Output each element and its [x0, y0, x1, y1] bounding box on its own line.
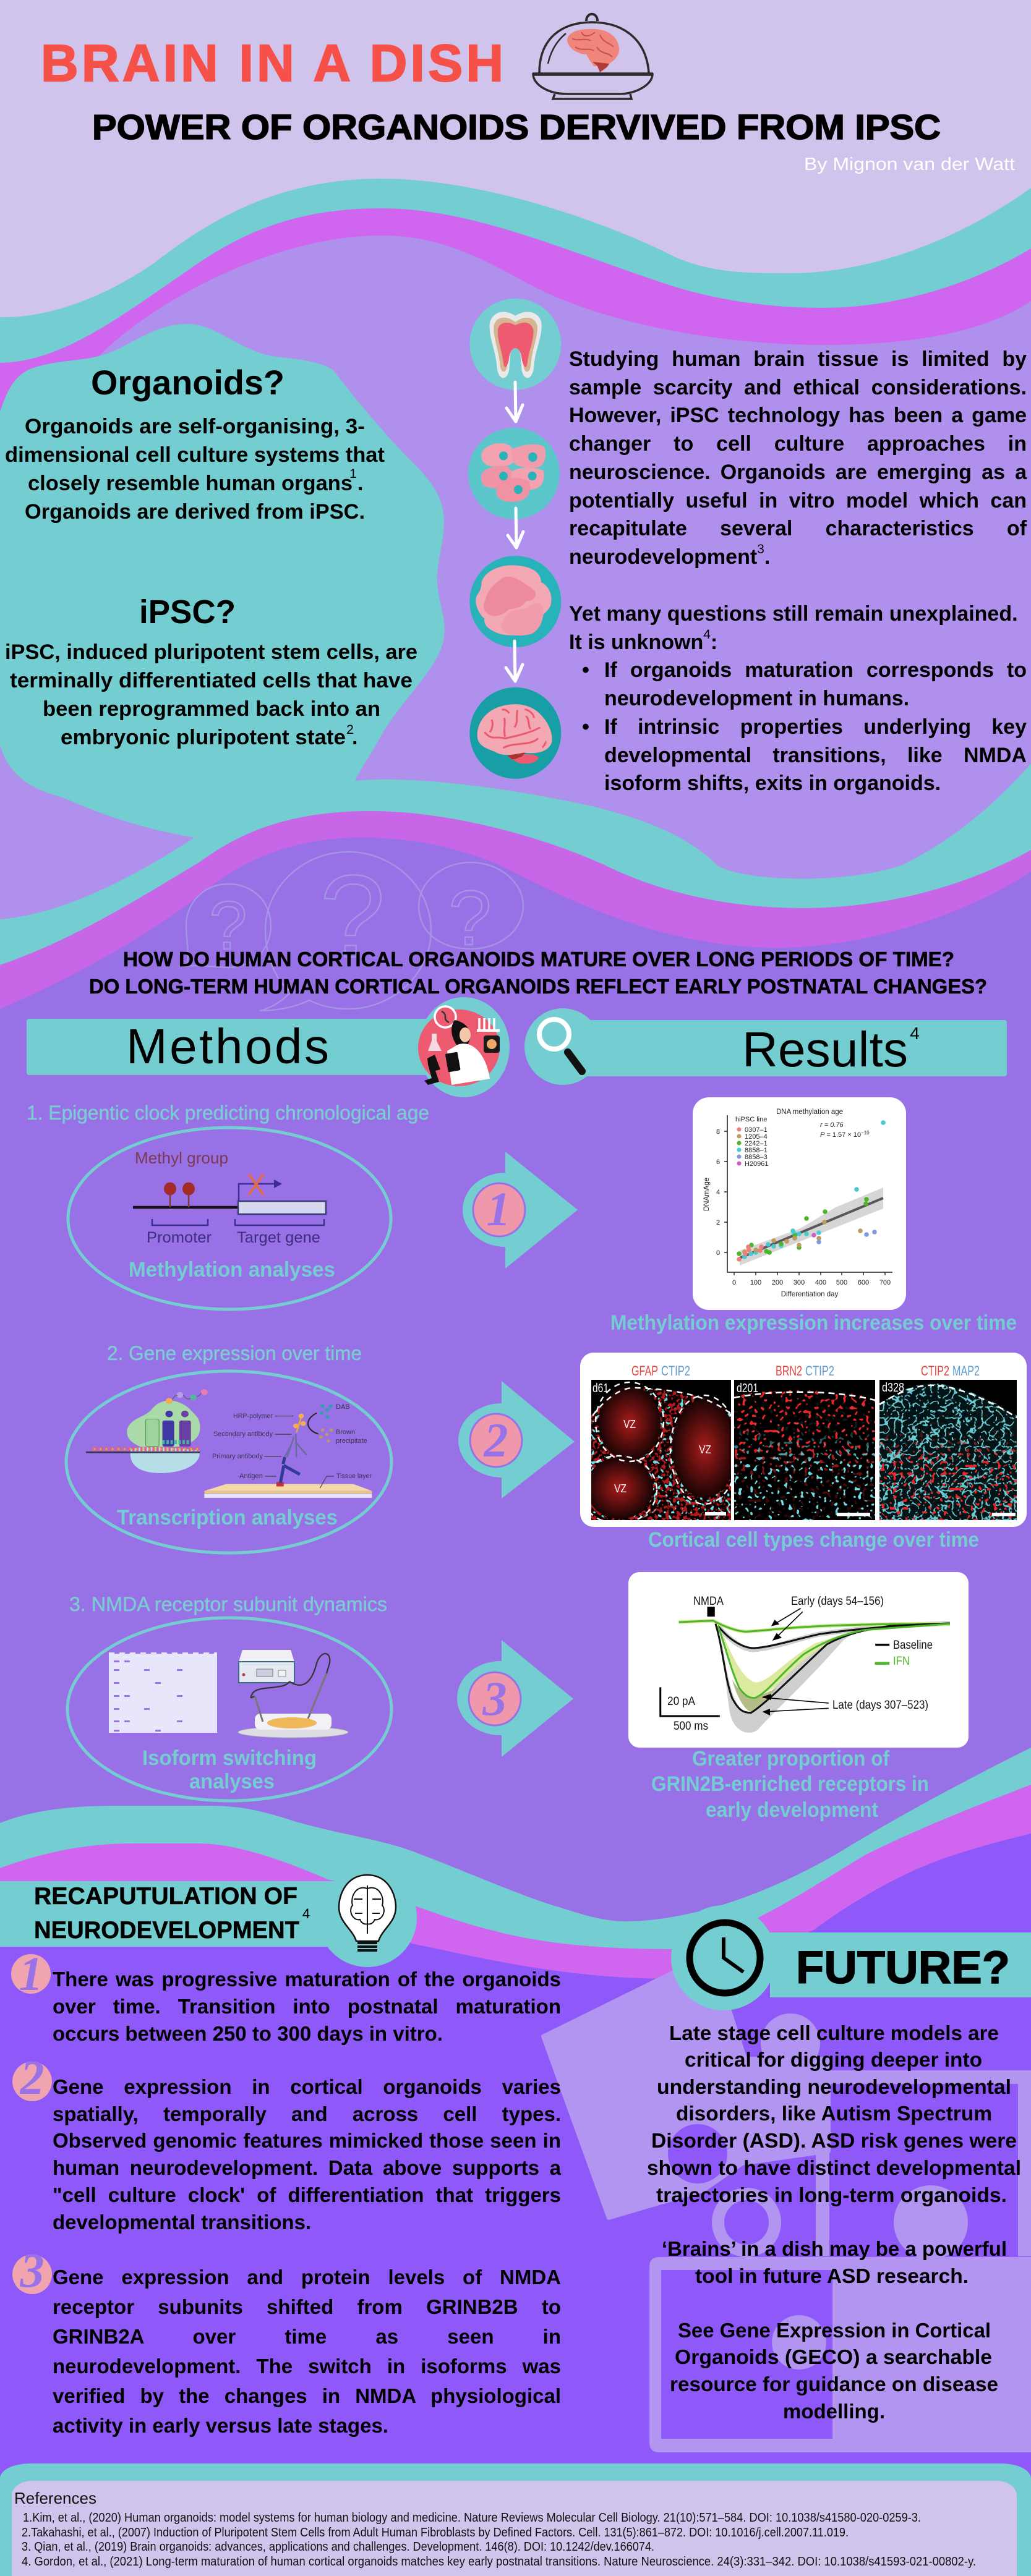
chart: cortical cell type images: BRN2 [776, 1363, 802, 1379]
text: why iPSC organoids matter: Studying human brain tissue is limited by [569, 347, 1027, 371]
icon: number 1 badge [11, 1947, 51, 2000]
arrow: step 3 [457, 1640, 573, 1757]
panel: results banner: Results [742, 1022, 908, 1077]
chart: cortical cell type images: MAP2 [952, 1363, 980, 1379]
panel: methylation method [68, 1128, 391, 1309]
text: iPSC definition: been reprogrammed back into an [43, 697, 380, 721]
text: future paragraphs [647, 2021, 1021, 2423]
text: why iPSC organoids matter: recapitulate several characteristics of [569, 517, 1027, 540]
panel: isoform switching method: Isoform switching [142, 1746, 317, 1770]
text: why iPSC organoids matter: neuroscience. Organoids are emerging as a [569, 461, 1027, 484]
text: organoids definition: closely resemble human organs [28, 472, 353, 495]
panel: transcription method: DAB [336, 1403, 350, 1411]
chart: DNA methylation age scatter: 400 [815, 1279, 826, 1286]
panel: references: 4. Gordon, et al., (2021) Long-term maturation of human cortical organoids matches key early postnatal transitions. Nature Neuroscience. 24(3):331–342. DOI: 10.1038/s41593-021-00802-y. [22, 2555, 976, 2569]
text: future paragraphs: critical for digging deeper into [685, 2048, 982, 2071]
panel: methods banner: Methods [126, 1019, 329, 1074]
text: future paragraphs: trajectories in long-term organoids. [656, 2183, 1007, 2206]
panel: transcription method: Brown [336, 1429, 355, 1436]
icon: light bulb brain [339, 1875, 396, 1950]
text: open questions list: Yet many questions still remain unexplained. [569, 602, 1018, 626]
image: d61 panel: VZ [623, 1418, 636, 1430]
panel: definitions blob [0, 324, 445, 838]
text: open questions list [569, 602, 1027, 795]
panel: results banner [524, 1008, 1007, 1085]
panel: references: 3. Qian, et al., (2019) Brain organoids: advances, applications and challenges. Development. 146(8). DOI: 10.1242/dev.166074. [22, 2540, 654, 2554]
text: why iPSC organoids matter [569, 347, 1027, 569]
chart: DNA methylation age scatter: 2 [716, 1219, 720, 1226]
chart: DNA methylation age scatter: DNA methylation age [776, 1108, 843, 1116]
text: organoids definition: Organoids are derived from iPSC. [25, 500, 365, 524]
chart: DNA methylation age scatter: 200 [772, 1279, 783, 1286]
heading: Organoids: Organoids? [91, 363, 284, 402]
text: open questions list: • [582, 715, 589, 739]
panel: references: 1.Kim, et al., (2020) Human organoids: model systems for human biology and medicine. Nature Reviews Molecular Cell Biology. 21(10):571–584. DOI: 10.1038/s41580-020-0259-3. [23, 2511, 921, 2525]
chart: cortical cell type images: GFAP [631, 1363, 658, 1379]
text: finding 2: developmental transitions. [53, 2211, 311, 2234]
image: d201 panel [734, 1380, 875, 1520]
chart: DNA methylation age scatter: 1205–4 [745, 1133, 768, 1141]
icon: speech bubbles with question marks: ? [209, 888, 247, 964]
text: open questions list: • [582, 658, 589, 682]
text: iPSC definition [5, 640, 417, 749]
icon: clock [690, 1923, 760, 1993]
chart: DNA methylation age scatter: r = 0.76 [820, 1121, 844, 1129]
icon: brain under a glass cloche [533, 14, 653, 99]
chart: DNA methylation age scatter [693, 1097, 906, 1310]
icon: stem cells [468, 428, 560, 519]
icon: gel [109, 1654, 217, 1733]
text: organoids definition: 1 [349, 467, 357, 481]
chart: DNA methylation age scatter: −10 [861, 1130, 870, 1136]
panel: future banner [671, 1905, 1031, 2010]
panel: references [0, 2463, 1031, 2576]
text: future paragraphs: understanding neurodevelopmental [657, 2075, 1011, 2098]
chart: DNA methylation age scatter: 0 [732, 1279, 736, 1286]
icon: number 2 badge [12, 2051, 52, 2104]
chart: NMDA current traces: 20 pA [667, 1695, 695, 1708]
arrow: tooth to cells [507, 382, 523, 422]
text: organoids definition: dimensional cell culture systems that [5, 443, 385, 467]
panel: transcription method: Primary antibody [212, 1453, 263, 1460]
arrow: step 3: 3 [482, 1672, 507, 1725]
text: why iPSC organoids matter: However, iPSC technology has been a game [569, 404, 1027, 427]
chart: DNA methylation age scatter: P = 1.57 × 10 [820, 1131, 861, 1139]
heading: research questions: HOW DO HUMAN CORTICAL ORGANOIDS MATURE OVER LONG PERIODS OF TIME? [123, 948, 954, 971]
text: finding 3: GRINB2A over time as seen in [53, 2325, 561, 2348]
panel: references: 2.Takahashi, et al., (2007) Induction of Pluripotent Stem Cells from Adult Human Fibroblasts by Defined Factors. Cell. 131(5):861–872. DOI: 10.1016/j.cell.2007.11.019. [22, 2526, 849, 2540]
caption: result 2: Cortical cell types change over time [648, 1528, 979, 1552]
caption: result 3: Greater proportion of [692, 1747, 890, 1770]
icon: speech bubbles with question marks: ? [320, 851, 385, 982]
heading: step 1: 1. Epigentic clock predicting chronological age [27, 1102, 429, 1124]
text: future paragraphs: resource for guidance on disease [670, 2373, 998, 2395]
text: finding 2: human neurodevelopment. Data above supports a [53, 2156, 561, 2179]
arrow: step 1 [463, 1152, 578, 1269]
chart: DNA methylation age scatter: 2242–1 [745, 1140, 768, 1147]
chart: cortical cell type images [580, 1353, 1027, 1527]
chart: NMDA current traces: Late (days 307–523) [832, 1699, 928, 1712]
text: finding 1: There was progressive maturation of the organoids [53, 1968, 561, 1991]
icon: tooth [469, 299, 561, 390]
icon: speech bubbles with question marks: ? [448, 875, 492, 961]
image: d61 panel: d61 [593, 1382, 609, 1395]
arrow: cells to organoid [508, 508, 523, 548]
chart: NMDA current traces: IFN [893, 1655, 910, 1668]
text: iPSC definition: 2 [346, 723, 354, 737]
chart: DNA methylation age scatter: hiPSC line [735, 1116, 767, 1123]
text: organoids definition: . [357, 472, 363, 495]
chart: DNA methylation age scatter: 100 [750, 1279, 761, 1286]
text: finding 3 [53, 2266, 561, 2437]
text: finding 3: verified by the changes in NMDA physiological [53, 2384, 561, 2407]
text: future paragraphs: tool in future ASD research. [695, 2264, 969, 2287]
text: finding 2: spatially, temporally and across cell types. [53, 2102, 561, 2125]
chart: DNA methylation age scatter: Differentiation day [781, 1291, 838, 1298]
arrow: organoid to brain [506, 641, 523, 681]
icon: number 3 badge: 3 [20, 2243, 45, 2297]
icon: organoid [469, 556, 561, 647]
chart: NMDA current traces: 500 ms [674, 1720, 708, 1733]
chart: DNA methylation age scatter: 600 [858, 1279, 869, 1286]
panel: recapitulation banner: 4 [302, 1906, 310, 1921]
text: iPSC definition: terminally differentiated cells that have [10, 669, 413, 692]
text: why iPSC organoids matter: potentially useful in vitro model which can [569, 489, 1027, 512]
arrow: step 2 [458, 1381, 575, 1498]
panel: transcription method: precipitate [336, 1437, 367, 1445]
panel: recapitulation banner [0, 1868, 417, 1967]
icon: electrophoresis device [238, 1650, 348, 1738]
text: finding 1 [53, 1968, 561, 2045]
panel: methylation method: Methylation analyses [129, 1258, 335, 1282]
panel: references: References [14, 2489, 96, 2507]
text: future paragraphs: disorders, like Autism Spectrum [676, 2102, 992, 2125]
text: future paragraphs: See Gene Expression in Cortical [678, 2319, 991, 2342]
panel: recapitulation banner: RECAPUTULATION OF [34, 1883, 297, 1910]
icon: magnifying glass [539, 1019, 582, 1071]
text: finding 1: over time. Transition into postnatal maturation [53, 1995, 561, 2018]
chart: NMDA current traces [628, 1572, 969, 1748]
panel: methylation method: Methyl group [135, 1149, 228, 1167]
text: open questions list: If organoids maturation corresponds to [604, 658, 1027, 682]
icon: speech bubbles with question marks [186, 851, 523, 1011]
panel: transcription method: Tissue layer [336, 1473, 372, 1480]
caption: result 3 [651, 1747, 929, 1822]
text: open questions list: neurodevelopment in humans. [604, 687, 909, 710]
chart: DNA methylation age scatter: 0 [716, 1249, 720, 1257]
text: iPSC definition: iPSC, induced pluripotent stem cells, are [5, 640, 417, 664]
icon: number 2 badge: 2 [20, 2051, 45, 2104]
text: organoids definition [5, 415, 385, 524]
panel: methylation method: Target gene [237, 1229, 320, 1246]
text: why iPSC organoids matter: sample scarcity and ethical considerations. [569, 376, 1027, 399]
text: future paragraphs: Organoids (GECO) a searchable [675, 2345, 992, 2368]
image: d328 panel: d328 [882, 1381, 904, 1395]
chart: DNA methylation age scatter: 6 [716, 1158, 720, 1166]
title: BRAIN IN A DISH [41, 34, 503, 92]
chart: DNA methylation age scatter: 700 [879, 1279, 891, 1286]
panel: transcription method: HRP-polymer [233, 1413, 273, 1420]
panel: transcription method: Antigen [239, 1473, 263, 1480]
chart: NMDA current traces: Baseline [893, 1639, 933, 1652]
text: finding 2 [53, 2075, 562, 2234]
caption: result 3: GRIN2B-enriched receptors in [651, 1772, 929, 1796]
panel: methylation method: Promoter [147, 1229, 212, 1246]
chart: DNA methylation age scatter: H20961 [745, 1160, 769, 1168]
icon: scientist [418, 1006, 500, 1086]
heading: step 3: 3. NMDA receptor subunit dynamics [69, 1593, 387, 1615]
text: open questions list: developmental transitions, like NMDA [604, 744, 1027, 767]
caption: result 3: early development [706, 1798, 878, 1822]
heading: iPSC: iPSC? [139, 593, 236, 631]
text: iPSC definition: embryonic pluripotent state [61, 726, 346, 749]
chart: DNA methylation age scatter: 0307–1 [745, 1126, 768, 1134]
chart: NMDA current traces: Early (days 54–156) [791, 1595, 884, 1608]
text: future paragraphs: ‘Brains’ in a dish may be a powerful [662, 2237, 1007, 2260]
text: open questions list: If intrinsic properties underlying key [604, 715, 1027, 739]
icon: number 3 badge [12, 2243, 52, 2297]
text: finding 3: Gene expression and protein levels of NMDA [53, 2266, 561, 2289]
image: d328 panel [879, 1380, 1017, 1520]
image: d201 panel: d201 [737, 1382, 758, 1395]
image: d61 panel: VZ [614, 1482, 627, 1495]
panel: recapitulation banner: NEURODEVELOPMENT [34, 1917, 299, 1944]
panel: methods banner [27, 997, 510, 1097]
heading: step 2: 2. Gene expression over time [107, 1342, 362, 1364]
icon: puzzle pieces backdrop [543, 1953, 1031, 2452]
image: d61 panel [591, 1380, 731, 1520]
chart: DNA methylation age scatter: 8858–3 [745, 1154, 768, 1161]
chart: DNA methylation age scatter: 4 [716, 1189, 720, 1196]
panel: transcription method: Transcription analyses [117, 1506, 338, 1529]
text: finding 3: receptor subunits shifted from GRINB2B to [53, 2295, 561, 2318]
chart: cortical cell type images: CTIP2 [661, 1363, 690, 1379]
text: finding 2: Observed genomic features mimicked those seen in [53, 2129, 561, 2152]
text: future paragraphs: Disorder (ASD). ASD risk genes were [651, 2129, 1017, 2152]
chart: DNA methylation age scatter: 8858–1 [745, 1147, 768, 1154]
text: organoids definition: Organoids are self-organising, 3- [25, 415, 365, 438]
text: iPSC definition: . [352, 726, 357, 749]
text: finding 3: neurodevelopment. The switch in isoforms was [53, 2355, 561, 2378]
arrow: step 1: 1 [486, 1182, 511, 1236]
text: finding 1: occurs between 250 to 300 days in vitro. [53, 2022, 443, 2045]
heading: research questions: DO LONG-TERM HUMAN CORTICAL ORGANOIDS REFLECT EARLY POSTNATAL CHANGES? [89, 975, 987, 998]
chart: NMDA current traces: NMDA [693, 1595, 724, 1608]
panel: isoform switching method [67, 1618, 391, 1801]
image: d61 panel: VZ [699, 1443, 711, 1456]
heading: research questions [89, 948, 987, 998]
text: future paragraphs: shown to have distinct developmental [647, 2156, 1021, 2179]
text: finding 2: Gene expression in cortical organoids varies [53, 2075, 561, 2098]
chart: DNA methylation age scatter: 8 [716, 1128, 720, 1136]
chart: cortical cell type images: CTIP2 [805, 1363, 834, 1379]
text: future paragraphs: modelling. [783, 2400, 885, 2423]
chart: DNA methylation age scatter: 500 [836, 1279, 847, 1286]
chart: DNA methylation age scatter: 300 [794, 1279, 805, 1286]
text: finding 3: activity in early versus late stages. [53, 2414, 388, 2437]
panel: transcription method [66, 1371, 391, 1553]
chart: cortical cell type images: CTIP2 [921, 1363, 949, 1379]
text: open questions list: isoform shifts, exits in organoids. [604, 772, 941, 795]
text: why iPSC organoids matter: neurodevelopment3. [569, 542, 770, 569]
icon: brain [469, 687, 561, 779]
text: why iPSC organoids matter: changer to cell culture approaches in [569, 432, 1027, 456]
panel: results banner: 4 [910, 1024, 920, 1043]
subtitle: POWER OF ORGANOIDS DERVIVED FROM IPSC [92, 108, 941, 147]
panel: isoform switching method: analyses [189, 1770, 275, 1793]
author byline: By Mignon van der Watt [804, 155, 1015, 174]
icon: number 1 badge: 1 [19, 1947, 43, 2000]
chart: DNA methylation age scatter: DNAmAge [703, 1178, 711, 1211]
text: future paragraphs: Late stage cell culture models are [669, 2021, 999, 2044]
panel: future banner: FUTURE? [796, 1942, 1010, 1993]
arrow: step 2: 2 [484, 1413, 508, 1467]
text: finding 2: "cell culture clock' of differentiation that triggers [53, 2183, 561, 2206]
panel: transcription method: Secondary antibody [213, 1430, 273, 1438]
text: open questions list: It is unknown4: [569, 627, 717, 654]
